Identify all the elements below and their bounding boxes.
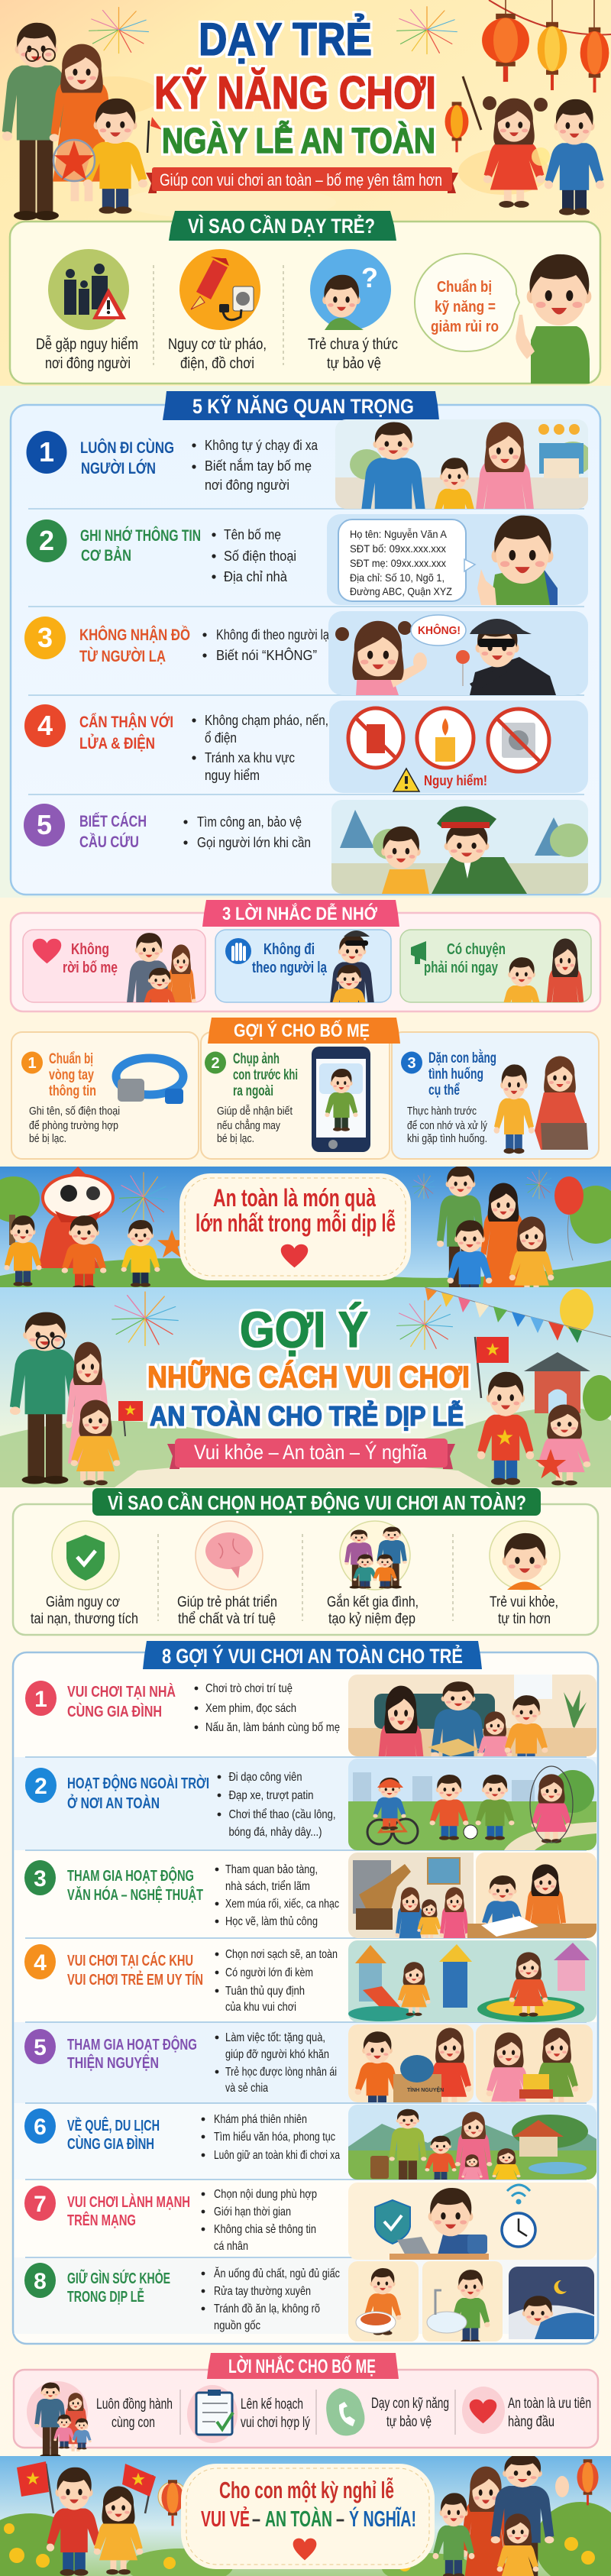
tip card 3: practise situations: khi gặp tình huống. (407, 1132, 487, 1145)
tip card 3: practise situations: cụ thể (428, 1083, 460, 1099)
tip card 3: practise situations: 3 (407, 1055, 416, 1072)
skill 5: CẦU CỨU (79, 833, 139, 851)
speech bubble: giảm rủi ro (431, 319, 499, 335)
closing message plaque (181, 2464, 435, 2569)
closing family (433, 2453, 599, 2576)
idea 2: Đạp xe, trượt patin (229, 1789, 313, 1802)
reminder: plan: Lên kế hoạch (241, 2396, 303, 2413)
reason labels 2: tự tin hơn (498, 1611, 551, 1627)
idea 8: Rửa tay thường xuyên (214, 2285, 311, 2298)
idea 3: THAM GIA HOẠT ĐỘNG (67, 1866, 194, 1885)
reminder: phone skills: Dạy con kỹ năng (371, 2396, 449, 2412)
boy pointing (516, 254, 591, 384)
idea 4: của khu vui chơi (225, 2001, 296, 2014)
reason labels (36, 335, 398, 372)
info speech bubble (338, 519, 475, 601)
illustration: charity: TÌNH NGUYỆN (407, 2086, 444, 2093)
closing banner (0, 2453, 611, 2576)
tip card 1: wristband: vòng tay (49, 1067, 94, 1083)
info speech bubble: Địa chỉ: Số 10, Ngõ 1, (350, 571, 445, 584)
idea 3: VĂN HÓA – NGHỆ THUẬT (67, 1885, 203, 1904)
tip card 1: wristband: Ghi tên, số điện thoại (29, 1105, 120, 1118)
reason labels 2 (31, 1594, 558, 1627)
tip card 1: wristband: thông tin (49, 1083, 96, 1099)
reminder: safety first (462, 2387, 591, 2434)
illustration: asking a police officer (331, 800, 588, 894)
idea 6: Tìm hiểu văn hóa, phong tục (214, 2130, 335, 2144)
gift message plaque (179, 1173, 411, 1280)
reminder: accompany (27, 2381, 173, 2458)
skill 1: 1 (39, 436, 54, 468)
panel: eight safe play ideas (13, 1641, 598, 2344)
tip card 3: practise situations: để con nhớ và xử lý (407, 1119, 487, 1132)
reminder card: speak up: Có chuyện (447, 941, 506, 958)
skill 4: nguy hiểm (205, 768, 260, 783)
reason labels 2: Gắn kết gia đình, (327, 1594, 419, 1610)
skill 3: Biết nói “KHÔNG” (216, 647, 317, 663)
skill 4: Không chạm pháo, nến, (205, 713, 328, 728)
reason labels: Trẻ chưa ý thức (308, 336, 398, 353)
idea 5: THAM GIA HOẠT ĐỘNG (67, 2035, 197, 2053)
title: DẠY TRẺ (199, 14, 372, 65)
illustration: countryside trip (348, 2105, 596, 2180)
idea 6: VỀ QUÊ, DU LỊCH (67, 2116, 160, 2134)
heading ribbon: reminders: LỜI NHẮC CHO BỐ MẸ (228, 2354, 376, 2377)
icon: child question: ? (361, 262, 378, 293)
idea 2 (25, 1768, 336, 1839)
reminder card: no strangers (215, 929, 392, 1003)
tip card 2: photo on phone: Chụp ảnh (233, 1051, 280, 1067)
tip card 2: photo on phone: Giúp dễ nhận biết (217, 1105, 293, 1118)
second title (147, 1301, 470, 1432)
idea 6 (24, 2108, 340, 2162)
family with flag left (10, 1312, 143, 1485)
idea 7: Chọn nội dung phù hợp (214, 2188, 317, 2201)
idea 5 (24, 2029, 337, 2095)
skill 2: Địa chỉ nhà (224, 569, 288, 584)
idea 2: HOẠT ĐỘNG NGOÀI TRỜI (67, 1774, 209, 1792)
second hero: safe play ideas (0, 1287, 611, 1487)
idea 5: Trẻ học được lòng nhân ái (225, 2066, 337, 2079)
subtitle ribbon (146, 167, 458, 193)
skill 2: Tên bố mẹ (224, 527, 281, 542)
skill 5 (24, 804, 311, 851)
illustration: healthy habits (348, 2261, 594, 2344)
idea 3: Học vẽ, làm thủ công (225, 1915, 318, 1928)
idea 2: 2 (34, 1774, 47, 1799)
skill 5: Tìm công an, bảo vệ (197, 814, 302, 830)
reminder: plan (187, 2385, 310, 2443)
illustration: girl refuses stranger (328, 611, 588, 695)
idea 4 (24, 1944, 338, 2014)
illustration: prohibited items (329, 701, 588, 793)
illustration: family holding hands (335, 419, 588, 509)
second title: NHỮNG CÁCH VUI CHƠI (147, 1359, 470, 1394)
tip card 2: photo on phone: con trước khi (233, 1067, 298, 1083)
tip card 1: wristband: bé bị lạc. (29, 1132, 66, 1145)
idea 6: Luôn giữ an toàn khi đi chơi xa (214, 2149, 340, 2162)
idea 6: Khám phá thiên nhiên (214, 2113, 307, 2126)
idea 3: Xem múa rối, xiếc, ca nhạc (225, 1898, 339, 1911)
reminder: accompany: cùng con (112, 2415, 155, 2431)
idea 8: Ăn uống đủ chất, ngủ đủ giấc (214, 2266, 340, 2280)
idea 8: GIỮ GÌN SỨC KHỎE (67, 2269, 170, 2287)
title (154, 14, 436, 160)
heading ribbon: tips: GỢI Ý CHO BỐ MẸ (234, 1020, 370, 1041)
closing message plaque: – (336, 2507, 344, 2532)
tip card 3: practise situations: Thực hành trước (407, 1105, 477, 1118)
idea 4: Chọn nơi sạch sẽ, an toàn (225, 1948, 338, 1961)
tip card 1: wristband: 1 (27, 1055, 37, 1072)
idea 2: bóng đá, nhảy dây...) (229, 1826, 322, 1839)
tip card 3: practise situations (392, 1032, 599, 1159)
reminder: phone skills: tự bảo vệ (386, 2414, 432, 2430)
lion dance and children (5, 1167, 186, 1290)
reason labels 2: Giảm nguy cơ (46, 1594, 120, 1610)
hero illustration: fireworks and lanterns (69, 0, 611, 219)
panel: why teach children (10, 211, 600, 384)
idea 3: Tham quan bảo tàng, (225, 1863, 318, 1876)
closing message plaque: AN TOÀN (265, 2506, 332, 2532)
reminder: safety first: hàng đầu (508, 2414, 554, 2430)
second subtitle ribbon: Vui khỏe – An toàn – Ý nghĩa (194, 1441, 428, 1464)
skill 3: TỪ NGƯỜI LẠ (79, 647, 166, 665)
gift message plaque: lớn nhất trong mỗi dịp lễ (196, 1209, 396, 1237)
skill 2: Số điện thoại (224, 549, 296, 564)
heading ribbon: why teach: VÌ SAO CẦN DẠY TRẺ? (188, 213, 375, 238)
tip card 1: wristband (11, 1032, 199, 1159)
icon: happy child (490, 1521, 560, 1590)
reminder card: stay with parents: Không (71, 941, 109, 958)
panel: why safe activities (13, 1488, 598, 1635)
hero right children with lantern and sparkler (445, 76, 604, 215)
family with balloon (437, 1167, 584, 1287)
info speech bubble: Đường ABC, Quận XYZ (350, 585, 452, 597)
skill 2: CƠ BẢN (81, 547, 131, 565)
title: KỸ NĂNG CHƠI (154, 67, 436, 118)
idea 7: TRÊN MẠNG (67, 2211, 136, 2229)
heading ribbon: three reminders (202, 900, 399, 927)
idea 6: 6 (34, 2115, 47, 2140)
reason labels 2: Giúp trẻ phát triển (177, 1594, 277, 1610)
tip card 2: photo on phone: nếu chẳng may (217, 1118, 280, 1132)
idea 8: TRONG DỊP LỄ (67, 2288, 144, 2306)
second subtitle ribbon (167, 1438, 455, 1469)
idea 7: VUI CHƠI LÀNH MẠNH (67, 2193, 190, 2211)
speech bubble (415, 254, 519, 351)
reason labels 2: tạo kỷ niệm đẹp (328, 1611, 415, 1627)
closing message plaque: – (252, 2507, 260, 2532)
reason labels: tự bảo vệ (327, 355, 381, 372)
idea 1: VUI CHƠI TẠI NHÀ (67, 1683, 176, 1701)
idea 1: Nấu ăn, làm bánh cùng bố mẹ (205, 1721, 340, 1734)
skill 3: KHÔNG NHẬN ĐỒ (79, 626, 190, 644)
gift message plaque: An toàn là món quà (213, 1184, 376, 1212)
illustration: boy and info card (327, 514, 588, 605)
skill 2: 2 (39, 525, 54, 556)
info speech bubble: SĐT bố: 09xx.xxx.xxx (350, 542, 446, 555)
skill 4: ổ điện (205, 730, 237, 746)
speech bubble: Chuẩn bị (437, 279, 492, 296)
hero left family: father, mother, son with star lantern (2, 23, 162, 220)
icon: crowd danger (48, 249, 129, 330)
tip card 2: photo on phone: bé bị lạc. (217, 1132, 254, 1145)
idea 5: THIỆN NGUYỆN (67, 2053, 159, 2072)
skill 3 (24, 616, 330, 665)
idea 4: Tuân thủ quy định (225, 1985, 305, 1998)
skill 3: 3 (37, 622, 53, 653)
tip card 2: photo on phone: 2 (211, 1055, 220, 1072)
illustration: charity (348, 2024, 593, 2102)
callout: không (411, 615, 466, 646)
tip card 3: practise situations: Dặn con bằng (428, 1050, 496, 1066)
heading ribbon: three reminders: 3 LỜI NHẮC DỄ NHỚ (222, 902, 377, 924)
illustration: museum and art class (348, 1853, 596, 1938)
icon: green shield (52, 1521, 119, 1590)
panel: tips for parents (11, 1018, 599, 1159)
skill 3: Không đi theo người lạ (216, 627, 330, 642)
heading ribbon: why teach (169, 211, 396, 241)
closing message plaque: Ý NGHĨA! (349, 2506, 416, 2532)
icon: firecracker and socket (179, 249, 260, 330)
info speech bubble: Họ tên: Nguyễn Văn A (350, 528, 448, 540)
illustration: safe internet (348, 2183, 596, 2260)
idea 4: 4 (34, 1950, 47, 1976)
idea 2: Ở NƠI AN TOÀN (67, 1794, 160, 1812)
reason labels 2: thể chất và trí tuệ (178, 1611, 276, 1627)
reminder card: no strangers: Không đi (263, 941, 315, 958)
callout: không: KHÔNG! (418, 623, 461, 637)
heading ribbon: five skills (163, 391, 439, 420)
idea 2: Đi dạo công viên (229, 1771, 302, 1784)
panel: reminders for parents (14, 2353, 598, 2458)
closing message plaque: Cho con một kỳ nghỉ lễ (219, 2477, 394, 2503)
title: NGÀY LỄ AN TOÀN (162, 121, 435, 160)
idea 5: và sẻ chia (225, 2082, 268, 2095)
skill 4: LỬA & ĐIỆN (79, 734, 155, 752)
skill 5: Gọi người lớn khi cần (197, 835, 311, 850)
idea 7: cá nhân (214, 2240, 248, 2253)
info speech bubble: SĐT mẹ: 09xx.xxx.xxx (350, 557, 446, 569)
reminder card: stay with parents (22, 929, 206, 1003)
skill 4: CẨN THẬN VỚI (79, 713, 173, 731)
idea 7: Giới hạn thời gian (214, 2205, 291, 2218)
reason labels 2: Trẻ vui khỏe, (490, 1594, 558, 1610)
panel: three reminders (9, 900, 602, 1013)
reminder card: speak up: phải nói ngay (424, 960, 499, 976)
idea 5: giúp đỡ người khó khăn (225, 2048, 329, 2061)
panel: five important skills (11, 391, 600, 895)
subtitle ribbon: Giúp con vui chơi an toàn – bố mẹ yên tâm hơn (160, 170, 442, 189)
idea 1 (25, 1681, 340, 1734)
tip card 3: practise situations: tình huống (428, 1066, 483, 1083)
idea 6: CÙNG GIA ĐÌNH (67, 2134, 154, 2153)
second title: GỢI Ý (240, 1301, 368, 1358)
idea 1: Chơi trò chơi trí tuệ (205, 1682, 293, 1695)
banner: safety is the greatest gift (0, 1167, 611, 1287)
idea 4: VUI CHƠI TẠI CÁC KHU (67, 1952, 193, 1969)
second title: AN TOÀN CHO TRẺ DỊP LỄ (150, 1400, 464, 1432)
reason labels: nơi đông người (45, 355, 131, 372)
idea 5: 5 (34, 2035, 47, 2060)
heading ribbon: five skills: 5 KỸ NĂNG QUAN TRỌNG (192, 394, 414, 418)
tip card 2: photo on phone: ra ngoài (233, 1083, 273, 1099)
skill 4: 4 (37, 710, 53, 741)
heading ribbon: reminders (207, 2353, 399, 2379)
closing message plaque: VUI VẺ (201, 2506, 250, 2532)
idea 1: CÙNG GIA ĐÌNH (67, 1702, 162, 1720)
idea 8: 8 (34, 2269, 47, 2294)
temple (524, 1352, 611, 1421)
skill 1 (26, 431, 318, 493)
illustration: home play (348, 1675, 596, 1756)
skill 4 (24, 704, 328, 783)
idea 1: 1 (34, 1687, 47, 1712)
idea 3: nhà sách, triển lãm (225, 1879, 310, 1893)
heading ribbon: tips (208, 1018, 400, 1044)
idea 8: Tránh đồ ăn lạ, không rõ (214, 2303, 320, 2315)
skill 5: 5 (37, 809, 52, 840)
skill 1: Biết nắm tay bố mẹ (205, 458, 312, 474)
idea 3 (24, 1860, 339, 1928)
reason labels: Dễ gặp nguy hiểm (36, 335, 138, 353)
idea 7: Không chia sẻ thông tin (214, 2223, 316, 2236)
skill 1: LUÔN ĐI CÙNG (80, 439, 174, 457)
skill 1: NGƯỜI LỚN (81, 459, 156, 477)
icon: family bonding (340, 1521, 410, 1590)
reason labels: điện, đồ chơi (180, 355, 254, 372)
heading ribbon: eight ideas: 8 GỢI Ý VUI CHƠI AN TOÀN CHO TRẺ (162, 1643, 463, 1668)
decorations: fireworks, bunting, balloon (112, 1287, 611, 1350)
reason labels: Nguy cơ từ pháo, (168, 336, 267, 353)
children with flag right (475, 1337, 590, 1485)
skill 2: GHI NHỚ THÔNG TIN (80, 526, 201, 545)
idea 3: 3 (34, 1866, 47, 1892)
illustration: prohibited items: Nguy hiểm! (424, 773, 487, 788)
idea 8 (24, 2263, 340, 2332)
reminder: accompany: Luôn đồng hành (96, 2396, 173, 2413)
idea 5: Làm việc tốt: tặng quà, (225, 2031, 325, 2044)
reason labels 2: tai nạn, thương tích (31, 1611, 138, 1627)
idea 7: 7 (34, 2192, 47, 2217)
reminder card: speak up (399, 929, 592, 1003)
illustration: outdoor park (348, 1759, 596, 1850)
illustration: playground (348, 1940, 596, 2022)
trees and fireworks (0, 1170, 611, 1245)
idea 2: Chơi thể thao (cầu lông, (229, 1807, 336, 1821)
idea 1: Xem phim, đọc sách (205, 1702, 296, 1715)
tip card 1: wristband: để phòng trường hợp (29, 1119, 118, 1132)
idea 7 (24, 2186, 317, 2253)
idea 8: nguồn gốc (214, 2319, 260, 2332)
skill 5: BIẾT CÁCH (79, 813, 147, 830)
icon: brain (196, 1521, 263, 1590)
icon: child question (310, 249, 391, 330)
heading ribbon: eight ideas (143, 1641, 482, 1669)
skill 2 (26, 519, 296, 584)
flowers and foliage (0, 2502, 611, 2576)
reminder: plan: vui chơi hợp lý (241, 2415, 310, 2431)
skill 4: Tránh xa khu vực (205, 750, 295, 765)
tip card 1: wristband: Chuẩn bị (49, 1051, 93, 1067)
idea 4: Có người lớn đi kèm (225, 1966, 313, 1979)
reminder: phone skills (326, 2388, 449, 2435)
reminder card: no strangers: theo người lạ (252, 960, 328, 976)
skill 1: nơi đông người (205, 477, 289, 493)
children with flags (17, 2461, 187, 2576)
reminder card: stay with parents: rời bố mẹ (63, 960, 118, 976)
tip card 2: photo on phone (201, 1032, 390, 1159)
idea 4: VUI CHƠI TRẺ EM UY TÍN (67, 1971, 203, 1989)
speech bubble: kỹ năng = (435, 299, 496, 316)
skill 1: Không tự ý chạy đi xa (205, 438, 318, 453)
heading ribbon: why safe activities: VÌ SAO CẦN CHỌN HOẠT ĐỘNG VUI CHƠI AN TOÀN? (108, 1491, 526, 1514)
